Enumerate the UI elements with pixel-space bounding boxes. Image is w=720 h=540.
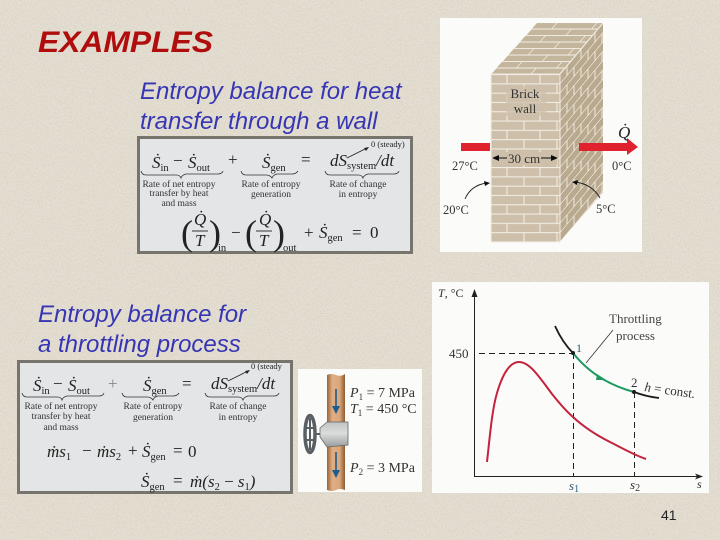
equation: rate balance: in [160,163,169,174]
equation: heat form: gen [328,233,343,244]
red heat arrows [461,138,638,155]
equation: mass flow form: Ṡ [142,442,150,461]
equation: entropy generation result [141,471,256,493]
equation: entropy generation result: ) [249,472,256,491]
equation: rate balance: and mass [43,423,79,433]
illustration: throttling valve: 1 [358,408,362,418]
equation: rate balance: Ṡ [68,376,76,395]
equation: rate balance: system [228,384,257,395]
equation: rate balance: Rate of net entropy [142,179,216,190]
equation: mass flow form: 0 [188,442,196,461]
illustration: brick wall: 5°C [596,202,616,216]
equation: mass flow form: 1 [66,452,71,463]
temperature pointers [465,180,600,199]
chart: T-s diagram: T, °C [438,286,464,300]
equation: heat form: in [218,243,227,254]
equation: rate balance: + [108,374,118,393]
equation: heat form: out [283,243,296,254]
chart: T-s diagram: process [616,328,655,343]
equation: rate balance: Rate of change [330,179,386,190]
equation: rate balance: out [196,163,210,174]
equation: entropy generation result: − [220,472,238,491]
equation: mass flow form [47,441,196,463]
equation: entropy generation result: = [173,471,183,490]
pipe [327,374,345,491]
heading: entropy balance for heat transfer: Entropy balance for heat [140,78,403,105]
axes [472,289,703,480]
equation: rate balance: and mass [161,199,197,209]
equation: rate balance: Ṡ [188,153,196,172]
equation: rate balance: generation [251,190,291,200]
equation: rate balance: /dt [375,151,395,170]
equation: heat form: = [352,223,362,242]
equation: mass flow form: ṁs [97,442,116,461]
equation: entropy generation result: Ṡ [141,472,150,491]
equation: rate balance: dS [330,151,347,170]
equation: rate balance [141,139,405,209]
chart: T-s diagram: Throttling [609,311,662,326]
equation: heat form: ) [273,213,285,253]
equation: heat form: ( [181,213,193,253]
illustration: throttling valve: 1 [359,392,363,402]
heading: entropy balance for throttling [38,301,247,358]
valve body [320,422,348,447]
illustration: throttling valve: P [349,461,359,476]
wall faces [491,23,603,242]
equation: mass flow form: ṁs [47,442,66,461]
illustration: brick wall: 27°C [452,159,478,173]
heading: entropy balance for throttling: a throttling process [38,331,241,358]
chart: T-s diagram: 450 [449,346,468,361]
equation: rate balance: − [53,374,63,393]
equation: rate balance: dS [211,374,228,393]
equation: entropy generation result: ṁ(s [190,472,215,491]
equation: rate balance: Ṡ [262,153,270,172]
illustration: throttling valve: P [349,386,359,401]
illustration: throttling valve: = 3 MPa [363,461,416,476]
equation: rate balance: = [182,374,192,393]
equation: entropy generation result: s [238,472,245,491]
equation: entropy generation result: 2 [215,482,220,493]
flow arrows [332,389,340,478]
equation: rate balance: transfer by heat [31,411,91,422]
saturation dome curve [487,362,646,462]
equation: rate balance: generation [133,413,173,423]
chart: T-s diagram [432,282,709,495]
equation: heat form: + [304,223,314,242]
equation: rate balance: Rate of net entropy [24,401,98,412]
equation: mass flow form: 2 [116,452,121,463]
width dimension [492,151,558,166]
illustration: throttling valve: = 450 °C [362,402,417,417]
illustration: throttling valve: T [350,402,359,417]
equation: rate balance: Rate of entropy [241,179,301,190]
chart: T-s diagram: 2 [635,483,640,494]
equation: mass flow form: = [173,441,183,460]
illustration: brick wall: wall [514,101,537,116]
equation: rate balance: /dt [256,374,276,393]
heading: entropy balance for throttling: Entropy balance for [38,301,247,328]
throttling process curve [573,353,634,392]
equation: rate balance: + [228,150,238,169]
chart: T-s diagram: s [630,477,635,492]
heading: entropy balance for heat transfer [140,78,403,135]
width dimension: 30 cm [508,151,540,166]
equation: rate balance: 0 (steady) [371,139,405,149]
title: EXAMPLES [38,26,213,59]
equation: rate balance [22,361,283,433]
illustration: brick wall [440,18,642,252]
illustration: throttling valve: = 7 MPa [363,386,416,401]
chart: T-s diagram: s [697,477,702,491]
equation: rate balance: in [42,386,50,397]
equation: entropy generation result: 1 [245,482,250,493]
equation: rate balance: 0 (steady [251,361,283,371]
valve handwheel [305,416,320,452]
equation: rate balance: Ṡ [33,376,42,395]
dashed guide lines [479,353,634,476]
equation: rate balance: system [347,161,376,172]
chart: T-s diagram: s [569,478,574,493]
panel: wall entropy balance equations [138,138,412,254]
equation: heat form: T [259,231,270,250]
equation: rate balance: in entropy [219,413,258,423]
equation: heat form: − [231,223,241,242]
equation: rate balance: Ṡ [152,153,160,172]
chart: T-s diagram: 1 [574,484,579,495]
equation: rate balance: Rate of entropy [123,401,183,412]
panel: throttling entropy balance equations [18,361,292,493]
equation: rate balance: = [301,150,311,169]
equation: rate balance: Rate of change [210,401,266,412]
equation: rate balance: gen [270,163,286,174]
equation: heat form [181,210,378,254]
equation: rate balance: transfer by heat [149,188,209,199]
equation: mass flow form: gen [150,452,166,463]
equation: rate balance: Ṡ [143,376,152,395]
illustration: throttling valve: 2 [359,467,363,477]
equation: heat form: ( [245,213,257,253]
equation: heat form: Q̇ [194,210,206,229]
equation: heat form: Ṡ [319,223,328,242]
equation: rate balance: out [76,386,90,397]
chart: T-s diagram: 1 [576,341,582,355]
page number: 41 [661,507,677,523]
chart: T-s diagram: 2 [631,375,638,390]
illustration: brick wall: Brick [511,86,540,101]
equation: entropy generation result: gen [150,482,165,493]
equation: heat form: ) [209,213,221,253]
state points [571,351,636,394]
equation: rate balance: gen [152,386,167,397]
equation: heat form: T [195,231,206,250]
equation: rate balance: − [173,151,183,170]
equation: heat form: Q̇ [259,210,271,229]
equation: rate balance: in entropy [339,190,378,200]
equation: mass flow form: − [82,441,92,460]
illustration: brick wall: Q̇ [618,123,630,142]
illustration: brick wall: 0°C [612,159,632,173]
equation: heat form: 0 [370,223,378,242]
constant enthalpy curve [555,326,659,398]
illustration: brick wall: 20°C [443,203,469,217]
illustration: throttling valve [298,369,422,492]
heading: entropy balance for heat transfer: transfer through a wall [140,108,378,135]
chart: T-s diagram: h = const. [644,379,696,401]
equation: mass flow form: + [128,441,138,460]
